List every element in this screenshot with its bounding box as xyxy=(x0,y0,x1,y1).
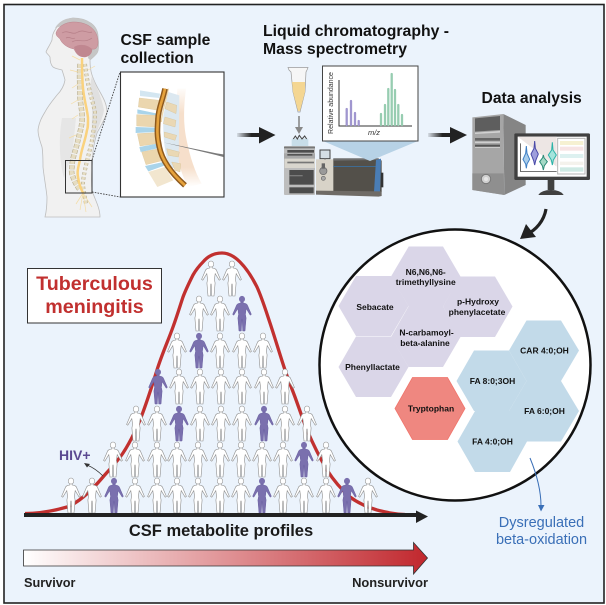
hexagon: N-carbamoyl-beta-alanine xyxy=(391,306,460,367)
arrow: sample to LC-MS xyxy=(237,127,276,144)
label: Survivor: Survivor xyxy=(24,576,76,590)
row 1 xyxy=(62,478,377,513)
peaks: green xyxy=(381,74,402,125)
chart: patient pictogram rows xyxy=(62,261,377,513)
row 3 xyxy=(127,406,316,441)
hexagon: N6,N6,N6-trimethyllysine: N6,N6,N6- xyxy=(406,267,446,277)
heading: Data analysis: Data analysis xyxy=(482,90,582,107)
heading: Liquid chromatography - Mass spectrometry: Liquid chromatography - xyxy=(263,23,449,40)
hexagon: FA 4:0;OH xyxy=(458,411,527,472)
hexagon: N6,N6,N6-trimethyllysine xyxy=(391,246,460,306)
arrow: x axis xyxy=(24,510,428,523)
hexagon: CAR 4:0;OH: CAR 4:0;OH xyxy=(520,346,569,356)
hexagon: p-Hydroxy phenylacetate xyxy=(443,276,512,337)
callout: dotted zoom box on lower spine xyxy=(66,72,120,197)
title box: Tuberculous meningitis: meningitis xyxy=(45,296,144,318)
arrow: HIV+ pointer xyxy=(84,463,103,476)
hexagon: Phenyllactate xyxy=(338,336,408,397)
row 6 xyxy=(190,296,251,331)
hexagon: Sebacate xyxy=(338,276,408,336)
gradient arrow: survivor to nonsurvivor xyxy=(24,542,428,574)
peaks: purple xyxy=(347,101,359,125)
arrow: data analysis to metabolite circle xyxy=(520,209,546,239)
label: Dysregulated beta-oxidation: Dysregulated xyxy=(499,515,584,531)
axis title: CSF metabolite profiles: CSF metabolite profiles xyxy=(129,522,313,540)
heading: Liquid chromatography - Mass spectrometry: Mass spectrometry xyxy=(263,41,407,58)
heading: CSF sample collection: collection xyxy=(120,50,194,67)
chart: distribution curve xyxy=(25,253,405,514)
hexagon: N-carbamoyl-beta-alanine: beta-alanine xyxy=(400,338,450,348)
icon: mass spectrometer xyxy=(316,150,383,197)
title box: Tuberculous meningitis xyxy=(28,268,162,323)
arrow: beta-oxidation pointer xyxy=(530,458,544,512)
chart: mass spectrum projection xyxy=(323,141,418,161)
hexagon: N6,N6,N6-trimethyllysine: trimethyllysine xyxy=(396,277,456,287)
row 2 xyxy=(104,442,335,477)
icon: monitor with violin plots xyxy=(514,133,590,195)
heading: CSF sample collection: CSF sample xyxy=(120,32,211,49)
illustration: human body with spine xyxy=(38,18,107,217)
hexagon: Phenyllactate: Phenyllactate xyxy=(345,362,400,372)
panel: metabolite circle xyxy=(320,230,590,500)
axis label: y: Relative abundance xyxy=(328,72,335,134)
hexagon: CAR 4:0;OH xyxy=(509,320,579,381)
hexagon: FA 4:0;OH: FA 4:0;OH xyxy=(472,436,513,446)
hexagon: FA 6:0;OH xyxy=(509,381,579,442)
label: HIV+: HIV+ xyxy=(59,447,91,463)
hexagon: Tryptophan: Tryptophan xyxy=(408,404,454,414)
icon: sample tube xyxy=(288,68,308,134)
chart: mass spectrum xyxy=(322,66,418,141)
icon: computer tower xyxy=(472,114,526,195)
spinal cord xyxy=(157,89,185,185)
axis label: x: m/z xyxy=(368,128,380,137)
hexagon: N-carbamoyl-beta-alanine: N-carbamoyl- xyxy=(399,328,454,338)
hexagon: FA 8:0;3OH: FA 8:0;3OH xyxy=(470,376,515,386)
icon: brain xyxy=(56,22,98,57)
hexagon: FA 6:0;OH: FA 6:0;OH xyxy=(524,406,565,416)
label: Nonsurvivor: Nonsurvivor xyxy=(352,575,428,590)
hexagon: Sebacate: Sebacate xyxy=(356,302,394,312)
hexagon: Tryptophan xyxy=(395,378,465,440)
arrow: LC-MS to data analysis xyxy=(428,127,467,144)
row 7 xyxy=(202,261,241,296)
icon: LC instrument stack xyxy=(284,135,315,195)
icon: needle xyxy=(163,142,223,157)
row 5 xyxy=(168,333,272,368)
hexagon: p-Hydroxy phenylacetate: p-Hydroxy xyxy=(457,296,499,306)
hexagon: FA 8:0;3OH xyxy=(456,350,526,411)
row 4 xyxy=(149,369,294,404)
title box: Tuberculous meningitis: Tuberculous xyxy=(36,273,153,295)
hexagon: p-Hydroxy phenylacetate: phenylacetate xyxy=(449,307,506,317)
label: Dysregulated beta-oxidation: beta-oxidation xyxy=(496,532,587,548)
panel: lumbar puncture inset xyxy=(120,72,224,197)
